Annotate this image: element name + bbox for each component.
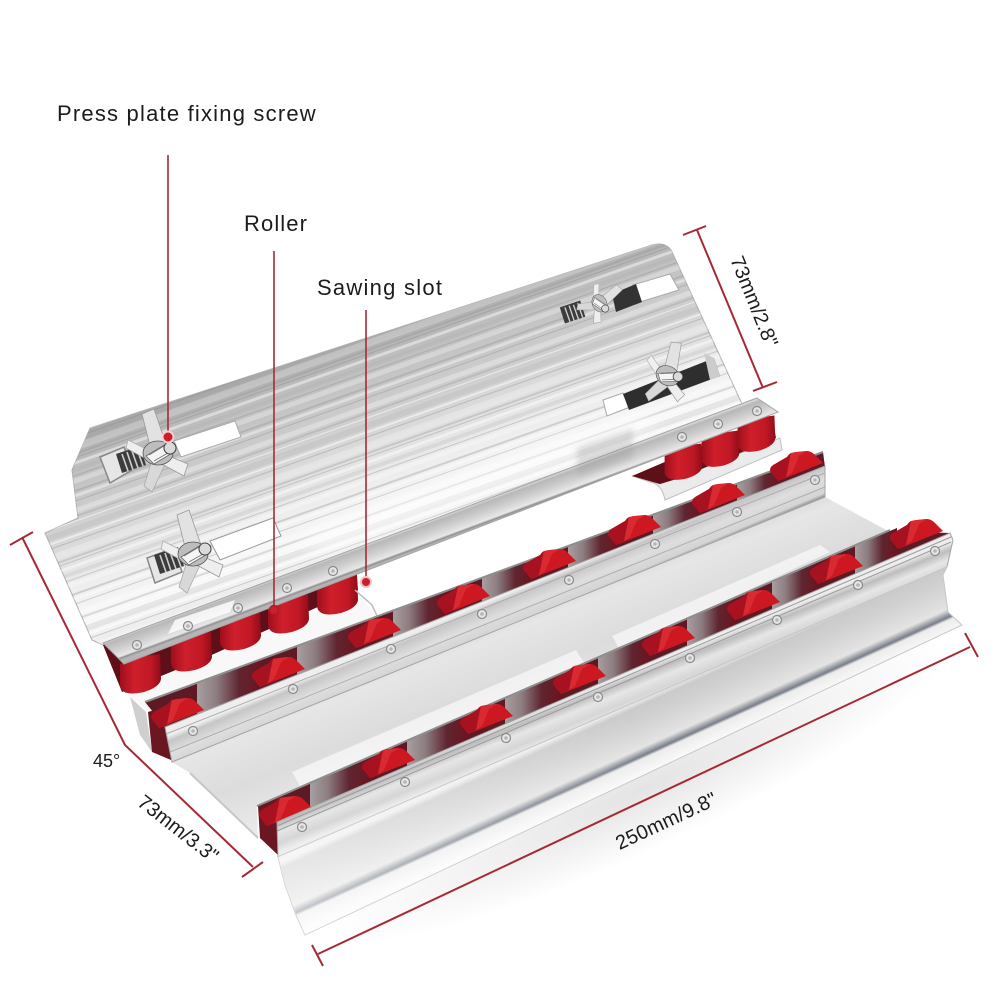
label: 73mm/2.8 inch: 73mm/2.8" bbox=[725, 253, 782, 350]
callout: sawing slot bbox=[317, 275, 443, 587]
icon: wing nut upper right bbox=[570, 275, 631, 329]
front rail face bbox=[277, 533, 953, 857]
strip between first row and rail bbox=[122, 594, 378, 712]
right roller bay interior bbox=[632, 416, 776, 484]
icon: wing nut lower right bbox=[630, 333, 705, 415]
dimension: plate height bbox=[683, 226, 777, 391]
middle rail rollers bbox=[151, 451, 823, 728]
front bar over first rollers bbox=[103, 398, 778, 664]
callout: roller: Roller bbox=[244, 211, 308, 236]
dimension: bottom length bbox=[312, 633, 978, 966]
front rail top lip bbox=[257, 530, 890, 806]
strip right of slot bbox=[632, 438, 782, 500]
middle rail screws bbox=[188, 476, 820, 736]
plate slot: upper left bbox=[100, 421, 241, 483]
front rail rollers bbox=[259, 519, 943, 826]
rail end side wall bbox=[130, 697, 152, 752]
front rail screws bbox=[298, 546, 940, 832]
back press plate bbox=[45, 244, 757, 645]
rail channel sections bbox=[197, 468, 780, 714]
first row of rollers bbox=[120, 416, 775, 693]
label: 45 degrees: 45° bbox=[93, 751, 120, 771]
plate bright lower band bbox=[300, 410, 660, 555]
callout: sawing slot: Sawing slot bbox=[317, 275, 443, 300]
left roller bay interior bbox=[103, 552, 358, 692]
middle rail bbox=[145, 451, 825, 762]
dimension: left 45 degree edge bbox=[10, 532, 263, 877]
icon: wing nut lower left bbox=[161, 510, 223, 593]
extruded lower lip bbox=[278, 567, 962, 935]
soft floor shadow bbox=[306, 592, 974, 988]
label: 73mm/3.3 inch: 73mm/3.3" bbox=[133, 791, 222, 868]
callout: press plate fixing screw bbox=[57, 101, 317, 442]
plate slot: lower left bbox=[147, 518, 281, 583]
callout: press plate fixing screw: Press plate fixing screw bbox=[57, 101, 317, 126]
plate slot: upper right bbox=[560, 274, 679, 324]
middle rail face bbox=[165, 466, 825, 762]
label: 250mm/9.8 inch: 250mm/9.8" bbox=[612, 789, 721, 855]
front rail bbox=[257, 519, 962, 935]
sawing slot cut edge bbox=[355, 590, 378, 618]
plate slot: lower right bbox=[603, 353, 720, 416]
front rail end interior bbox=[258, 796, 282, 855]
front rail channel sections bbox=[310, 528, 897, 808]
callout: roller bbox=[244, 211, 308, 614]
front rail channel band bbox=[257, 531, 950, 822]
middle rail channel band bbox=[145, 452, 825, 727]
flat base between rails bbox=[172, 497, 890, 838]
rail top lip bbox=[145, 452, 823, 702]
icon: wing nut upper left bbox=[126, 409, 188, 492]
rail end interior bbox=[148, 705, 171, 760]
